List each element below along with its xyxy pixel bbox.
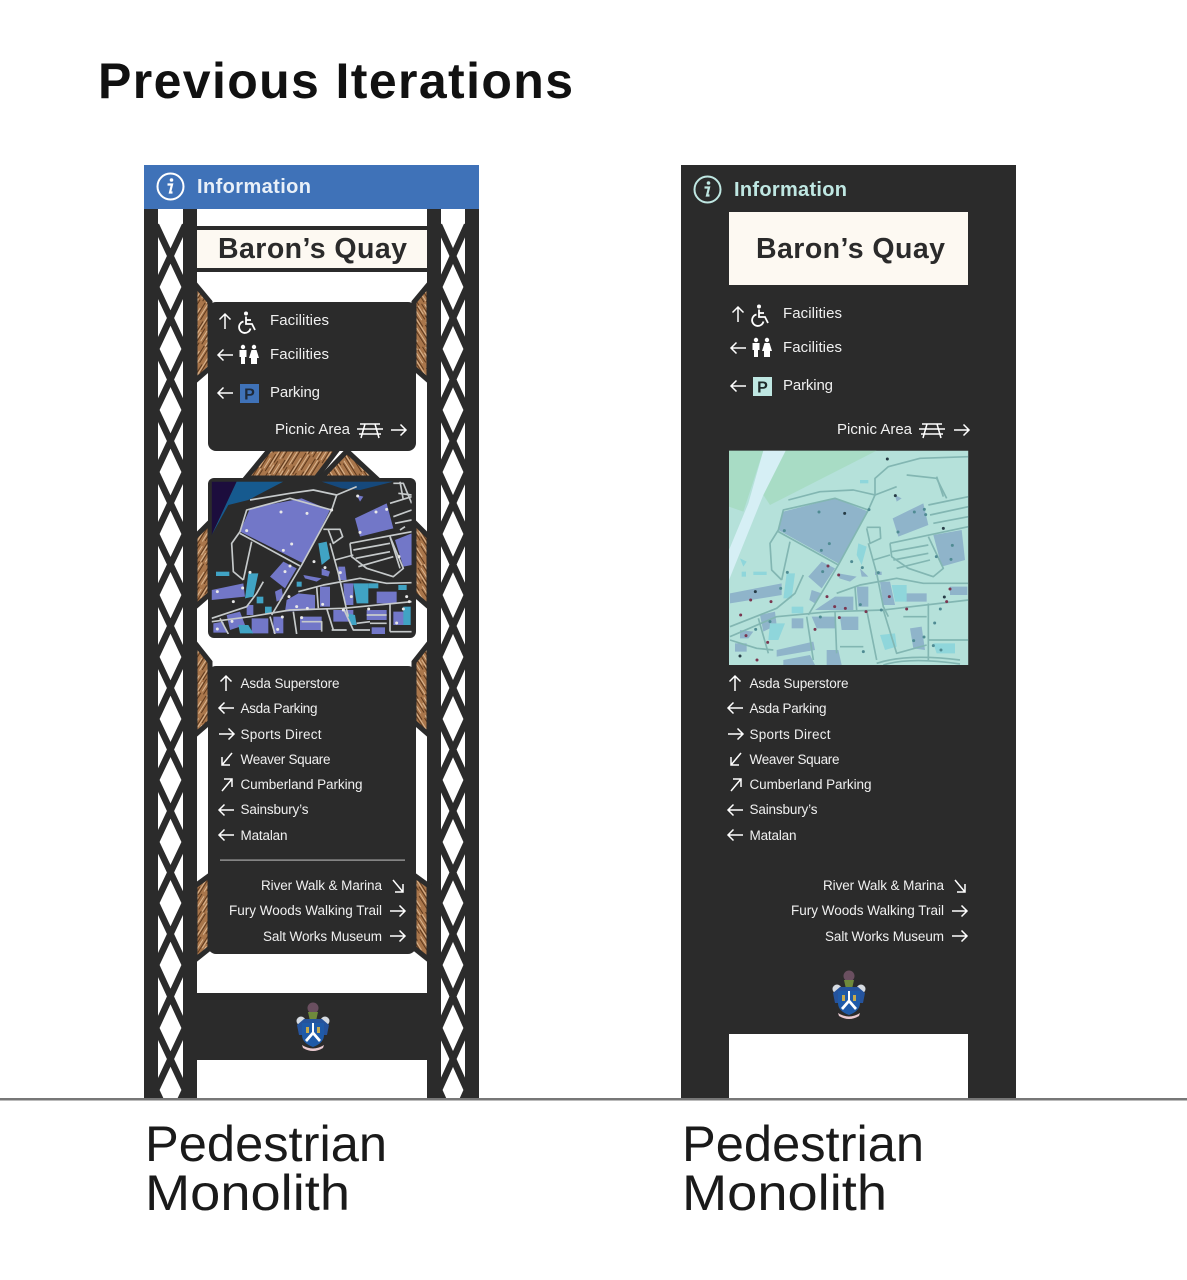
destination: Weaver Square bbox=[240, 752, 330, 767]
arrow right bbox=[219, 728, 234, 740]
panel: facilities directory bbox=[208, 302, 416, 451]
destination: Salt Works Museum bbox=[263, 929, 382, 944]
icon: picnic table bbox=[919, 424, 945, 438]
destination: River Walk & Marina bbox=[823, 878, 944, 893]
icon: info bbox=[694, 176, 720, 202]
icon: crest bbox=[296, 1002, 330, 1051]
destination: Fury Woods Walking Trail bbox=[791, 903, 944, 918]
arrow up bbox=[220, 314, 230, 329]
name plate: Baron’s Quay bbox=[756, 233, 945, 265]
destination: Matalan bbox=[750, 828, 796, 843]
icon: parking bbox=[240, 384, 259, 404]
destination: Sports Direct bbox=[240, 727, 322, 742]
label: Parking bbox=[270, 384, 320, 401]
panel: lattice monolith sign bbox=[144, 165, 479, 1152]
lattice right bbox=[441, 224, 465, 1098]
panel: dark street map bbox=[208, 478, 416, 638]
destination: Sainsbury’s bbox=[240, 802, 309, 817]
arrow up-right bbox=[731, 779, 741, 791]
arrow left bbox=[218, 388, 233, 398]
panel: plain monolith sign bbox=[681, 165, 1016, 1098]
destination: Cumberland Parking bbox=[240, 777, 362, 792]
label: Facilities bbox=[270, 312, 329, 329]
caption: right sign: Monolith bbox=[682, 1165, 887, 1221]
arrow down-left bbox=[731, 753, 741, 765]
icon: crest bbox=[832, 970, 866, 1019]
arrow right bbox=[390, 930, 405, 942]
arrow left bbox=[219, 702, 234, 714]
caption: right sign bbox=[682, 1116, 924, 1221]
icon: info bbox=[158, 174, 184, 200]
ground line bbox=[0, 1098, 1187, 1100]
arrow right bbox=[728, 728, 743, 740]
arrow right bbox=[952, 930, 967, 942]
arrow left bbox=[728, 702, 743, 714]
arrow left bbox=[219, 830, 234, 840]
icon: toilets bbox=[240, 345, 259, 364]
caption: left sign: Pedestrian bbox=[145, 1116, 387, 1172]
icon: picnic table bbox=[357, 424, 383, 438]
icon: parking: P bbox=[757, 380, 768, 396]
destination: Sports Direct bbox=[750, 727, 831, 742]
arrow down-left bbox=[222, 753, 232, 765]
destination: Fury Woods Walking Trail bbox=[229, 903, 382, 918]
icon: parking bbox=[753, 377, 772, 396]
arrow right bbox=[391, 424, 406, 436]
arrow down-right bbox=[393, 880, 403, 892]
arrow left bbox=[219, 804, 234, 816]
name plate bbox=[197, 226, 427, 272]
label: Facilities bbox=[783, 339, 842, 356]
base cut-out bbox=[729, 1034, 968, 1098]
label: Facilities bbox=[783, 305, 842, 322]
destinations directory bbox=[728, 676, 967, 944]
arrow right bbox=[954, 424, 969, 436]
destination: Cumberland Parking bbox=[750, 777, 872, 792]
arrow up bbox=[730, 676, 740, 691]
arrow left bbox=[728, 804, 743, 816]
destination: Salt Works Museum bbox=[825, 929, 944, 944]
panel: destinations directory bbox=[208, 666, 416, 954]
icon: toilets bbox=[752, 338, 772, 357]
arrow up-right bbox=[222, 779, 232, 791]
destination: Asda Parking bbox=[240, 701, 318, 716]
destination: Asda Superstore bbox=[750, 676, 848, 691]
light street map bbox=[729, 451, 968, 665]
arrow right bbox=[390, 906, 405, 916]
arrow down-right bbox=[955, 880, 965, 892]
arrow up bbox=[220, 676, 232, 691]
icon: wheelchair bbox=[752, 304, 768, 326]
header label: Information bbox=[197, 176, 311, 198]
destination: Matalan bbox=[240, 828, 288, 843]
title: Previous Iterations bbox=[98, 53, 573, 109]
icon: wheelchair bbox=[239, 312, 255, 333]
header label: Information bbox=[734, 179, 847, 201]
caption: right sign: Pedestrian bbox=[682, 1116, 924, 1172]
header band bbox=[144, 165, 479, 209]
arrow right bbox=[952, 906, 967, 916]
destination: Sainsbury’s bbox=[750, 802, 818, 817]
lattice posts bbox=[144, 165, 479, 1098]
crest band bbox=[183, 993, 441, 1060]
destination: Asda Parking bbox=[750, 701, 826, 716]
destination: Asda Superstore bbox=[240, 676, 340, 691]
arrow left bbox=[218, 350, 233, 360]
caption: left sign bbox=[145, 1116, 387, 1221]
name plate: Baron’s Quay bbox=[218, 233, 407, 265]
label: Picnic Area bbox=[275, 421, 351, 438]
lattice left bbox=[158, 224, 183, 1098]
icon: parking: P bbox=[244, 386, 255, 404]
name plate bbox=[729, 212, 968, 285]
destination: River Walk & Marina bbox=[261, 878, 382, 893]
arrow up bbox=[732, 307, 744, 322]
sign base with white inner bbox=[144, 165, 479, 1098]
facilities directory bbox=[731, 304, 969, 438]
arrow left bbox=[731, 380, 746, 392]
wood braces bbox=[195, 284, 429, 960]
destination: Weaver Square bbox=[750, 752, 840, 767]
caption: left sign: Monolith bbox=[145, 1165, 350, 1221]
arrow left bbox=[731, 342, 746, 354]
label: Facilities bbox=[270, 346, 329, 363]
label: Parking bbox=[783, 377, 833, 394]
label: Picnic Area bbox=[837, 421, 913, 438]
arrow left bbox=[728, 830, 743, 840]
